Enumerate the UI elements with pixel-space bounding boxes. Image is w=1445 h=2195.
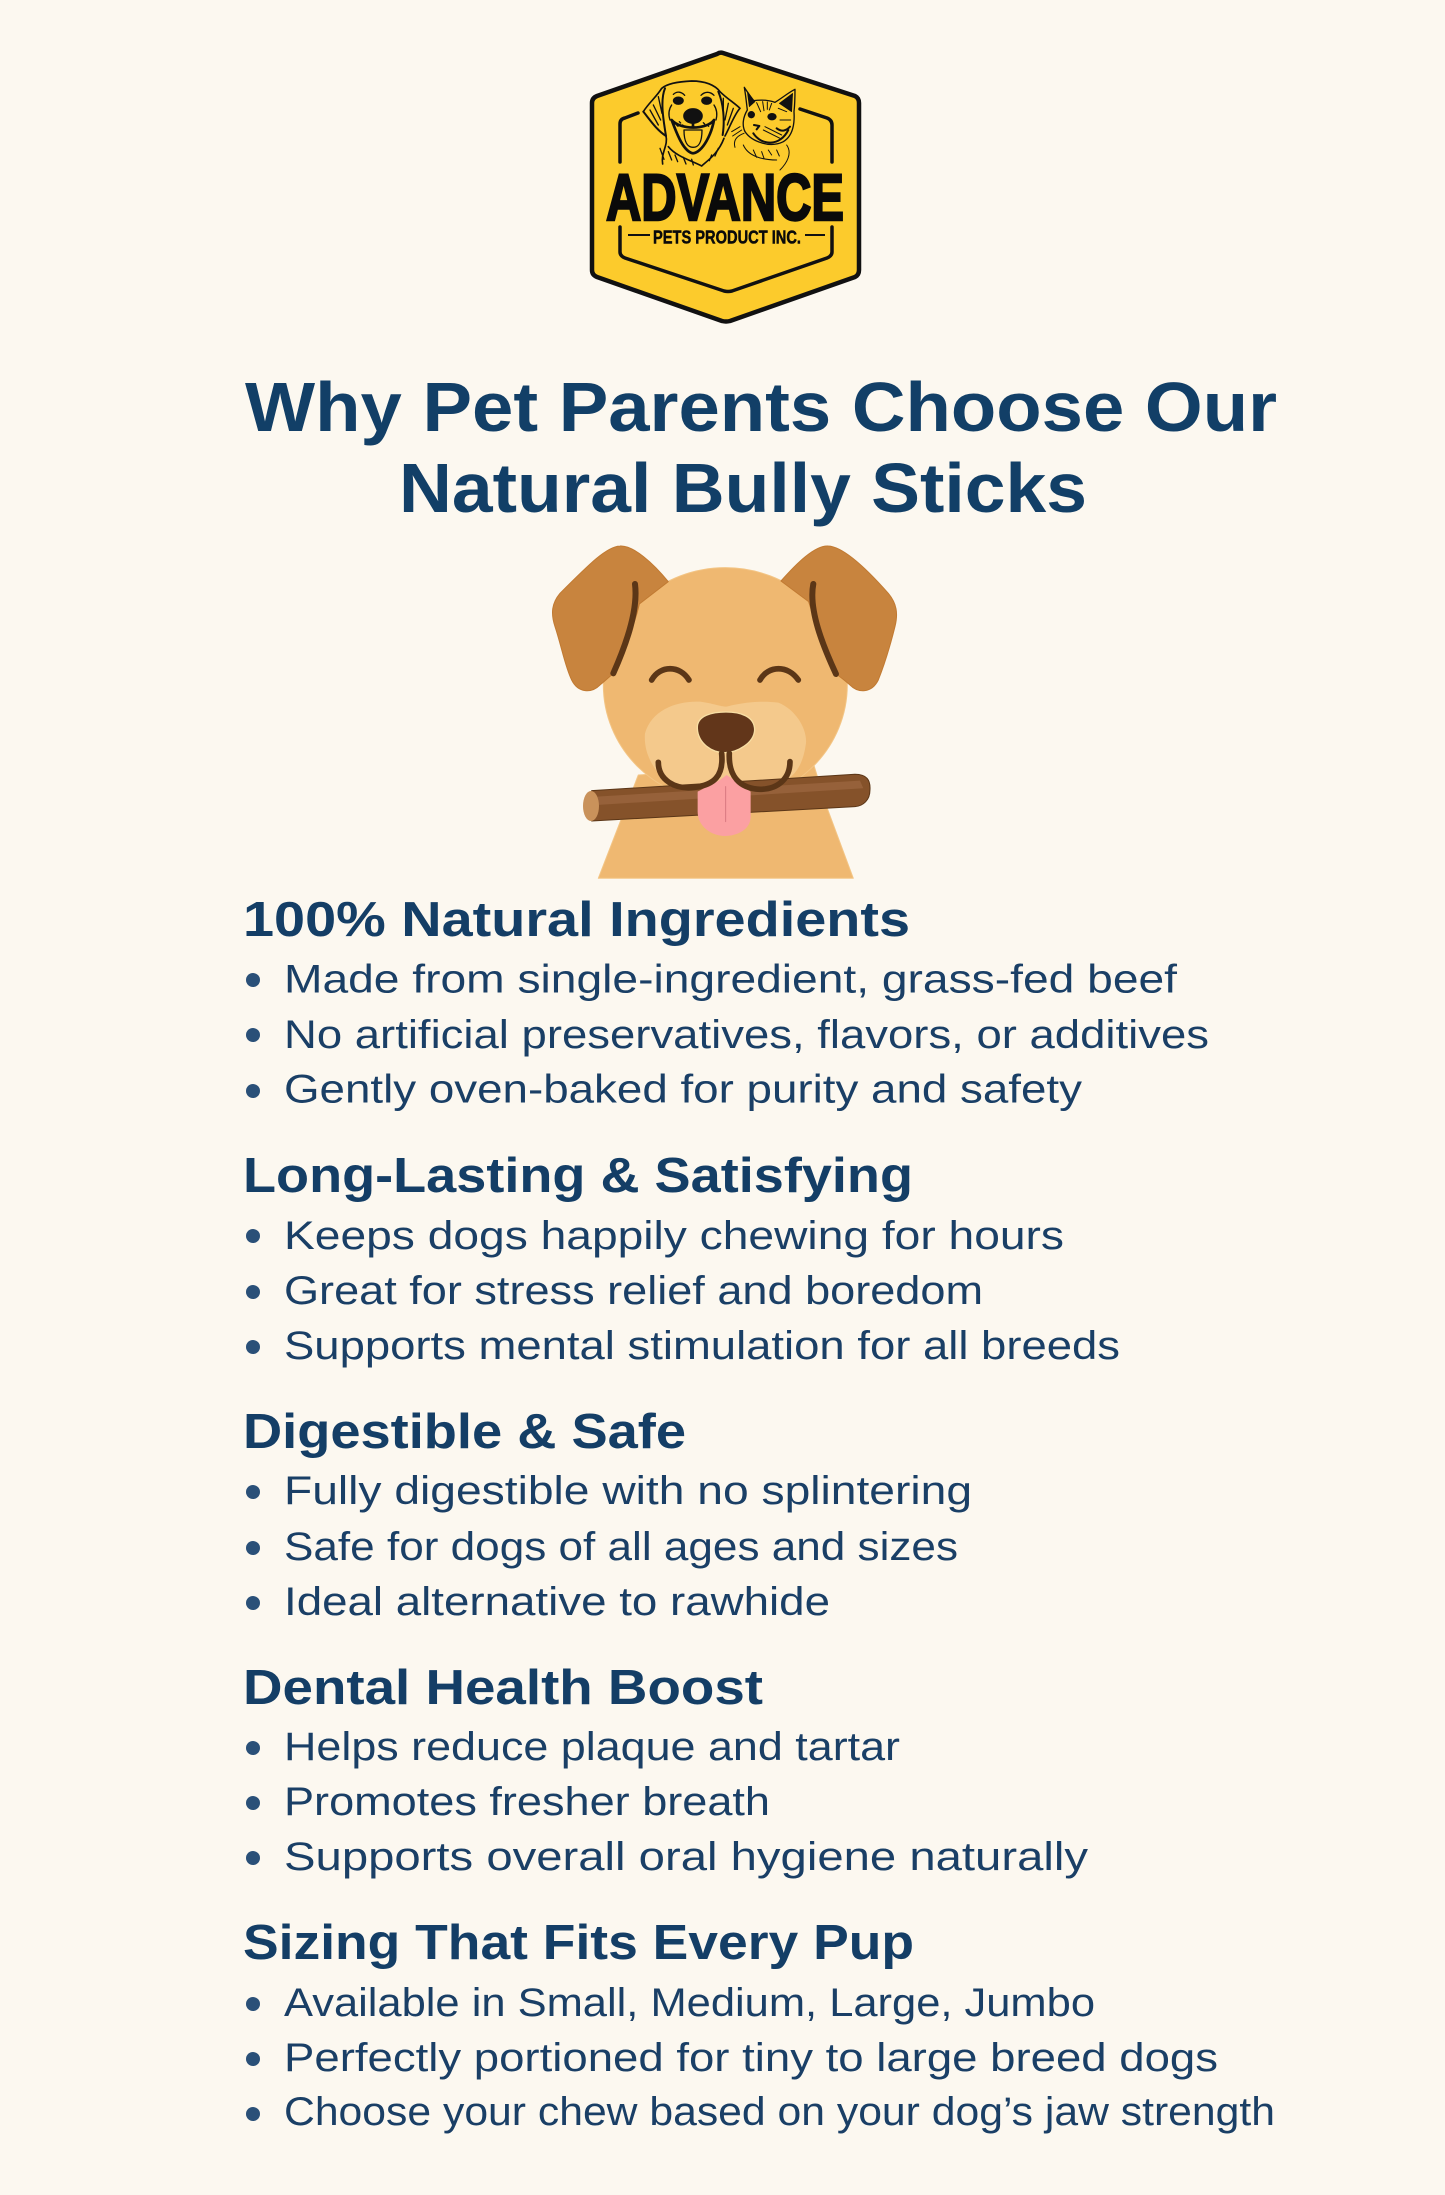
bullet list: Fully digestible with no splintering [284, 1469, 972, 1513]
bullet list: Choose your chew based on your dog’s jaw strength [284, 2090, 1275, 2134]
section: Digestible & Safe [243, 1405, 972, 1624]
title: Why Pet Parents Choose Our [245, 368, 1277, 446]
ear creases [613, 584, 836, 674]
bullet list [246, 958, 1209, 1112]
bullet list: Promotes fresher breath [284, 1780, 770, 1824]
heading: Sizing That Fits Every Pup [243, 1916, 914, 1970]
bullet list: Available in Small, Medium, Large, Jumbo [284, 1981, 1095, 2025]
mouth [658, 753, 790, 789]
bullet list: Helps reduce plaque and tartar [284, 1725, 900, 1769]
muzzle [645, 702, 806, 787]
bullet list [246, 1214, 1120, 1368]
section: Dental Health Boost [243, 1661, 1088, 1879]
bullet list: Supports overall oral hygiene naturally [284, 1835, 1088, 1879]
bullet list: Keeps dogs happily chewing for hours [284, 1214, 1064, 1258]
bullet list: Made from single-ingredient, grass-fed beef [284, 958, 1178, 1002]
bullet list: Ideal alternative to rawhide [284, 1580, 830, 1624]
section: Sizing That Fits Every Pup [243, 1916, 1275, 2134]
bullet list [246, 1981, 1275, 2134]
nose [697, 712, 755, 753]
left ear [552, 546, 668, 691]
bullet list: Safe for dogs of all ages and sizes [284, 1525, 958, 1569]
heading: 100% Natural Ingredients [243, 893, 910, 947]
stick [583, 774, 870, 821]
icon: cat line art [732, 87, 795, 170]
heading: Digestible & Safe [243, 1405, 686, 1459]
heading: Long-Lasting & Satisfying [243, 1149, 913, 1203]
bullet list: Perfectly portioned for tiny to large breed dogs [284, 2036, 1218, 2080]
bullet list [246, 1725, 1088, 1879]
bullet list: Gently oven-baked for purity and safety [284, 1068, 1082, 1112]
logo: Advance Pets Product Inc. badge [592, 53, 859, 322]
title: Natural Bully Sticks [399, 449, 1087, 527]
tongue [698, 775, 751, 836]
logo tagline: PETS PRODUCT INC. [653, 228, 801, 248]
bullet list: Great for stress relief and boredom [284, 1269, 983, 1313]
bullet list: No artificial preservatives, flavors, or additives [284, 1013, 1209, 1057]
puppy body [598, 763, 853, 878]
bullet list [246, 1469, 972, 1624]
heading: Dental Health Boost [243, 1661, 763, 1715]
section: Long-Lasting & Satisfying [243, 1149, 1120, 1368]
eyes [652, 669, 798, 680]
illustration: happy puppy holding a bully stick [552, 546, 897, 878]
logo wordmark: ADVANCE [606, 160, 844, 234]
bullet list: Supports mental stimulation for all breeds [284, 1324, 1120, 1368]
title [245, 368, 1277, 527]
icon: dog line art [643, 81, 740, 166]
right ear [781, 546, 897, 691]
section: 100% Natural Ingredients [243, 893, 1209, 1112]
puppy head [603, 568, 847, 802]
